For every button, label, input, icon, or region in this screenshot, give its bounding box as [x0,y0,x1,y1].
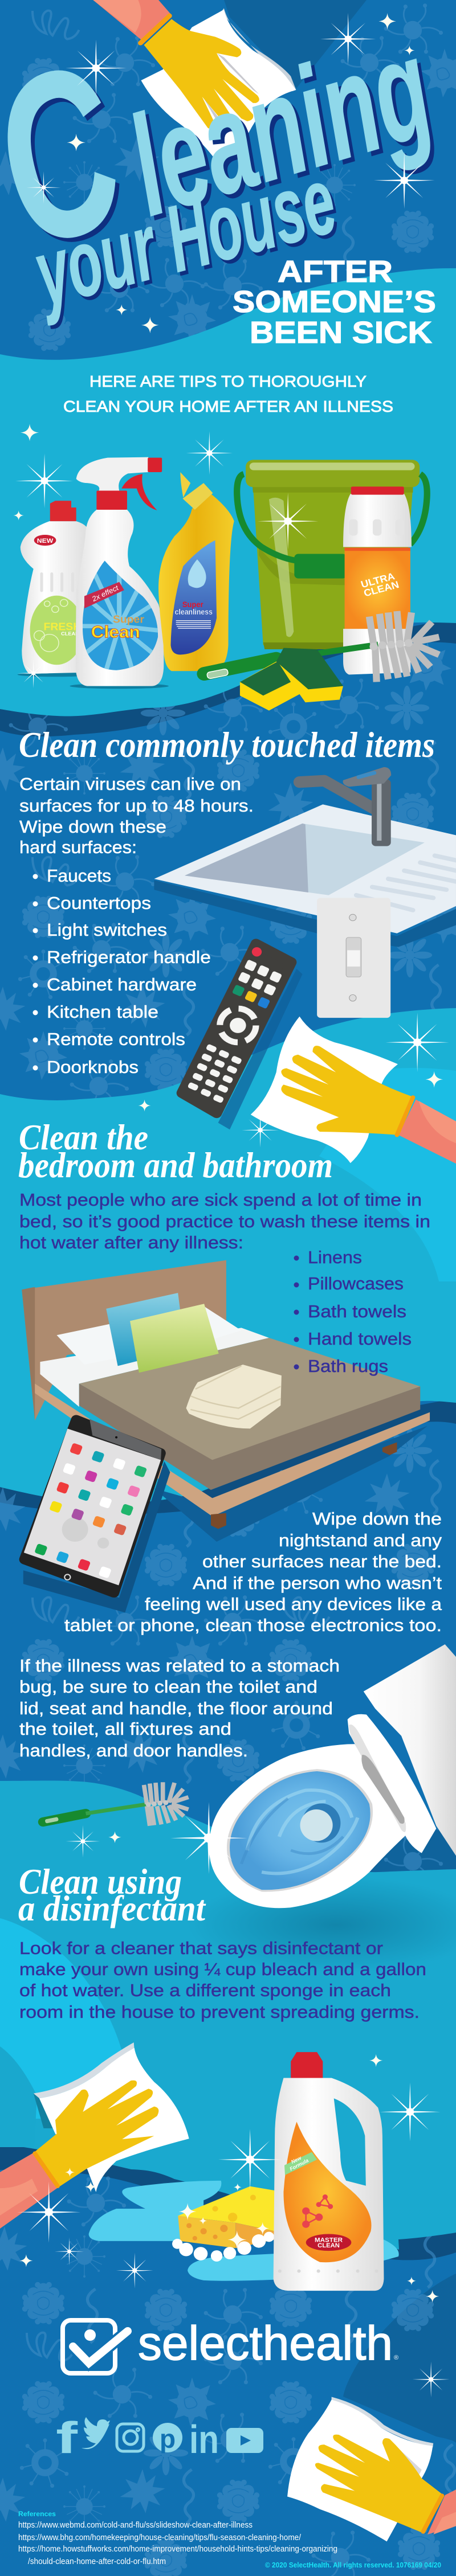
toilet shadow [188,1877,456,1973]
bottle: Formula [288,2157,310,2172]
references: https://www.webmd.com/cold-and-flu/ss/slideshow-clean-after-illness [18,2520,253,2530]
toilet bowl [209,1744,407,1908]
puddle [89,2181,399,2281]
intro text: HERE ARE TIPS TO THOROUGHLY [89,372,367,390]
cloth [34,2042,135,2098]
light teal curve [0,1918,132,2119]
sponges [240,648,343,711]
body: stomach bug: bug, be sure to clean the toilet and [19,1677,317,1697]
body: wipe down: other surfaces near the bed. [202,1551,442,1571]
illustration: gloved hand, left [0,2042,189,2229]
frame [35,1383,430,1516]
duvet [79,1383,420,1490]
yellow bottle [158,472,234,671]
bottle: MASTER [315,2237,343,2243]
icon: pinterest: p [160,2424,176,2454]
heading: clean the bedroom and bathroom: bedroom and bathroom [18,1145,333,1185]
icon: pinterest [153,2423,182,2454]
sink shadow [154,880,456,947]
list: wash items: Linens [308,1247,362,1267]
body: wipe down: feeling well used any devices like a [145,1594,442,1614]
body: look for a cleaner: room in the house to prevent spreading germs. [19,2002,420,2022]
title face [0,7,447,326]
yellow bottle: Super [182,600,203,609]
icon: youtube [226,2428,263,2453]
body: most people: Most people who are sick spend a lot of time in [19,1190,422,1210]
dark shape: top [224,0,367,88]
icon: twitter [82,2417,110,2449]
intro text [63,372,393,415]
yellow bottle: cleanliness [175,608,213,616]
arm [93,0,172,41]
list: wash items [294,1247,412,1376]
cloth [332,2397,433,2447]
bottle: New [290,2155,303,2165]
icon: facebook: f [56,2413,78,2463]
title shadow [0,11,451,330]
teal wave: section one [0,268,456,716]
body: certain viruses: Certain viruses can live on [19,774,241,794]
list: hard surfaces: Doorknobs [47,1057,139,1077]
heading: clean using a disinfectant [18,1861,206,1928]
icon: linkedin: in [189,2417,219,2462]
gloved hand with cloth [251,1017,456,1164]
arm [427,2489,456,2534]
icon: instagram [117,2424,144,2451]
teal wave: bedroom section [0,1008,456,1504]
spray bottle [76,457,169,686]
fresh bottle: FRESH [44,621,81,632]
list: hard surfaces: Kitchen table [47,1002,158,1022]
references [18,2510,337,2566]
bed shadow [154,1426,427,1542]
dark shape: bottom right [343,2274,456,2443]
subtitle: after someone's been sick: BEEN SICK [250,316,432,350]
sink [154,804,456,933]
sparkles [66,1802,247,1874]
list: hard surfaces: Countertops [47,893,151,913]
illustration: cleaning products [13,424,439,711]
toilet brush [43,1782,189,1826]
illustration: bed and tablet [22,1260,430,1612]
body: stomach bug [19,1656,340,1760]
list: hard surfaces [33,866,211,1077]
body: wipe down: Wipe down the [312,1509,442,1529]
headboard [22,1260,226,1420]
body: wipe down [64,1509,442,1635]
body: wipe down: tablet or phone, clean those electronics too. [64,1615,442,1635]
heading: clean the bedroom and bathroom [18,1117,333,1185]
glove [315,2435,443,2533]
subtitle: after someone's been sick: AFTER [278,255,393,289]
body: stomach bug: If the illness was related to a stomach [19,1656,340,1676]
pillows [56,1306,241,1365]
body: certain viruses: Wipe down these [19,817,166,837]
remote control [182,944,303,1129]
mattress [40,1328,269,1407]
list: wash items: Bath rugs [308,1356,388,1376]
list: wash items: Hand towels [308,1329,412,1349]
spray bottle: Clean [91,623,140,641]
faucet [300,767,391,846]
list: hard surfaces: Cabinet hardware [47,974,197,994]
references: https://www.bhg.com/homekeeping/house-cleaning/tips/flu-season-cleaning-home/ [18,2533,302,2542]
tablet [23,1419,170,1612]
water [230,1771,370,1890]
toilet brush [204,611,439,682]
cloth [221,8,296,91]
glove [34,2081,158,2188]
list: hard surfaces: Light switches [47,920,167,940]
social icons [56,2413,263,2463]
ultra clean bottle [343,486,412,674]
toilet tank [364,1644,456,1856]
title: Cleaning your House [0,7,451,330]
spray bottle: 2x effect [90,583,121,603]
list: wash items: Bath towels [308,1301,406,1321]
sponge [172,2186,275,2262]
towels [186,1365,282,1428]
references: References [18,2510,56,2518]
fresh bottle [21,501,90,674]
ultra clean bottle: ULTRA [360,571,396,590]
body: stomach bug: handles, and door handles. [19,1740,248,1760]
subtitle: after someone's been sick [233,255,436,350]
bottle [274,2052,384,2291]
body: wipe down: And if the person who wasn’t [193,1573,442,1593]
illustration: gloved hand and cloth top [93,0,296,159]
toilet seat [348,1714,436,1853]
body: most people [19,1190,430,1252]
heading: clean the bedroom and bathroom: Clean the [19,1117,148,1157]
glove [203,53,259,128]
body: certain viruses: hard surfaces: [19,837,137,857]
subtitle: after someone's been sick: SOMEONE’S [233,285,436,319]
sparkles: title [26,13,435,333]
body: look for a cleaner: of hot water. Use a different sponge in each [19,1980,391,2000]
list: wash items: Pillowcases [308,1273,404,1293]
sparkles [17,2054,450,2397]
logo: selecthealth: selecthealth [138,2316,393,2370]
ultra clean bottle: CLEAN [363,579,400,599]
logo: selecthealth: ® [394,2354,398,2361]
illustration: sponge and disinfectant bottle [17,2052,450,2397]
teal curve lower [0,2046,37,2147]
references: /should-clean-home-after-cold-or-flu.htm [28,2557,166,2566]
list: hard surfaces: Refrigerator handle [47,947,211,967]
intro text: CLEAN YOUR HOME AFTER AN ILLNESS [63,398,393,415]
illustration: gloved hand, bottom right [287,2397,456,2541]
body: most people: bed, so it’s good practice to wash these items in [19,1211,430,1231]
list: hard surfaces: Remote controls [47,1029,185,1049]
wave shadow bands [0,618,456,2260]
list: hard surfaces: Faucets [47,866,111,886]
illustration: toilet and brush [43,1644,456,1908]
illustration: faucet and sink [138,767,456,1164]
body: look for a cleaner [19,1938,426,2022]
sparkles [13,424,318,688]
shadows [18,673,93,677]
body: look for a cleaner: make your own using ¼ cup bleach and a gallon [19,1959,426,1979]
body: stomach bug: lid, seat and handle, the floor around [19,1698,333,1718]
fresh bottle: CLEAN [61,631,79,637]
teal wave: disinfectant section [0,1780,456,2250]
bucket [237,460,427,649]
body: look for a cleaner: Look for a cleaner that says disinfectant or [19,1938,383,1958]
body: certain viruses: surfaces for up to 48 hours. [19,796,254,816]
body: stomach bug: the toilet, all fixtures and [19,1719,231,1739]
sparkles [138,1013,449,1148]
copyright: © 2020 SelectHealth. All rights reserved. 1076169 04/20 [265,2561,441,2569]
body: most people: hot water after any illness: [19,1232,243,1252]
bottle: CLEAN [317,2242,340,2249]
lighter teal highlight [319,1068,456,1281]
references: https://home.howstuffworks.com/home-improvement/household-hints-tips/cleaning-organizing [18,2544,337,2554]
light switch [317,898,390,1018]
spray bottle: Super [113,613,145,625]
body: wipe down: nightstand and any [279,1530,442,1550]
heading: clean using a disinfectant: a disinfectant [18,1888,206,1928]
arm [0,2153,58,2229]
body: certain viruses [19,774,254,857]
fresh bottle: NEW [37,537,54,544]
heading: clean using a disinfectant: Clean using [19,1861,182,1902]
